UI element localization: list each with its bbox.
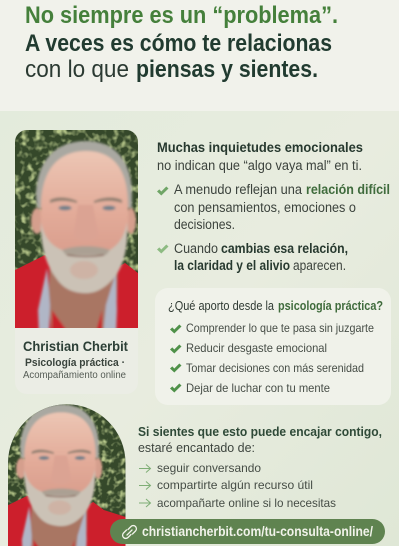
title line 1: No siempre es un “problema”. [25,2,338,29]
background: top band [0,0,399,111]
card heading [168,299,383,313]
title [25,2,338,83]
item 2: Reducir desgaste emocional [186,341,327,355]
portrait: bottom arch photo [8,404,126,546]
title line 3: con lo que [25,56,129,83]
offer 1: seguir conversando [157,461,261,475]
call to action: link pill [110,519,385,544]
text block: invitation: estaré encantado de: [138,441,255,455]
point 2: Cuando [174,241,218,256]
text block: intro: no indican que “algo vaya mal” en ti. [157,158,362,173]
text block: intro [157,140,363,173]
point 1: relación difícil [306,182,390,197]
point 1: A menudo reflejan una [174,182,302,197]
background: lower panel [0,111,399,546]
title line 3 [25,56,318,83]
list: offers [139,461,336,510]
panel: practical psychology [155,288,391,405]
subtitle: Acompañamiento online [23,370,126,381]
icon: check [157,244,168,254]
role: Psicología práctica · [25,357,125,369]
text block: intro: Muchas inquietudes emocionales [157,140,363,155]
point 2: la claridad y el alivio [174,258,290,273]
text block: invitation [138,424,382,455]
point 1: decisiones. [174,217,235,232]
portrait photo [15,130,138,328]
title line 3: piensas y sientes. [136,56,318,83]
point 1 [174,182,390,232]
title line 2: A veces es cómo te relacionas [25,30,332,57]
point 2: aparecen. [293,258,346,273]
list: main points [157,182,390,273]
item 4: Dejar de luchar con tu mente [186,381,330,395]
card heading: ¿Qué aporto desde la [168,299,274,313]
offer 2: compartirte algún recurso útil [157,478,313,492]
card heading: psicología práctica? [278,299,383,313]
point 1: con pensamientos, emociones o [174,200,356,215]
item 1: Comprender lo que te pasa sin juzgarte [186,321,374,335]
caption card [15,300,138,394]
panel: profile card [15,130,138,380]
point 2: cambias esa relación, [221,241,348,256]
offer 3: acompañarte online si lo necesitas [157,496,336,510]
card background [155,288,391,405]
icon: link [123,526,136,538]
point 2 [174,241,348,273]
item 3: Tomar decisiones con más serenidad [186,361,364,375]
icon: check [157,186,168,196]
text block: invitation: Si sientes que esto puede encajar contigo, [138,424,382,439]
name: Christian Cherbit [23,338,128,354]
